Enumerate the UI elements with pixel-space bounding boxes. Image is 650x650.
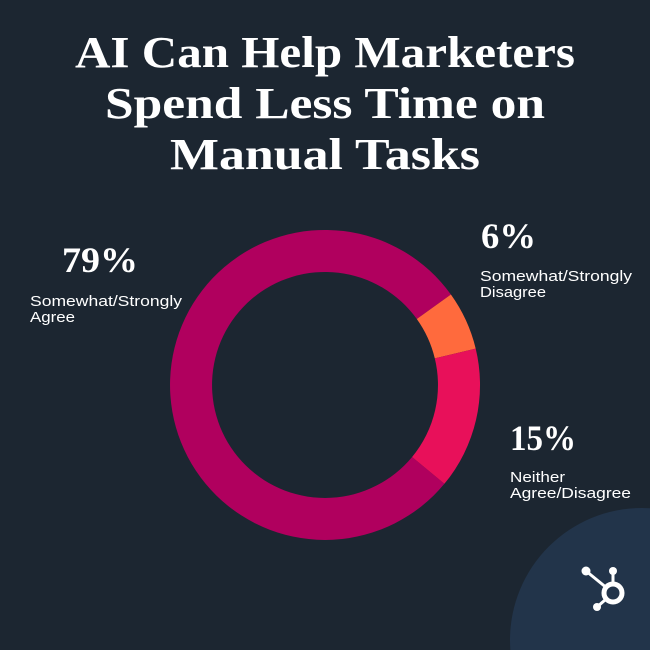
title: Spend Less Time on [105,79,545,128]
label: 79% agree: Somewhat/Strongly [30,293,183,310]
label: 6% disagree: Somewhat/Strongly [480,268,633,285]
label: 79% agree: Agree [30,309,75,326]
label: 6% disagree [480,216,633,301]
logo background circle [510,508,650,650]
label: 6% disagree: Disagree [480,284,546,301]
label: 15% neither: Agree/Disagree [510,485,631,502]
label: 79% agree [30,240,183,326]
title: Manual Tasks [170,130,480,179]
label: 6% disagree: 6% [481,216,536,256]
title: AI Can Help Marketers [75,28,575,77]
label: 15% neither: Neither [510,469,565,486]
segment: agree 79% [170,230,451,540]
segment: neither 15% [412,349,480,484]
label: 79% agree: 79% [62,240,138,280]
title [75,28,575,179]
label: 15% neither: 15% [510,418,576,458]
label: 15% neither [510,418,631,502]
icon: hubspot sprocket [582,566,622,611]
donut chart [170,230,480,540]
segment: disagree 6% [417,294,476,358]
